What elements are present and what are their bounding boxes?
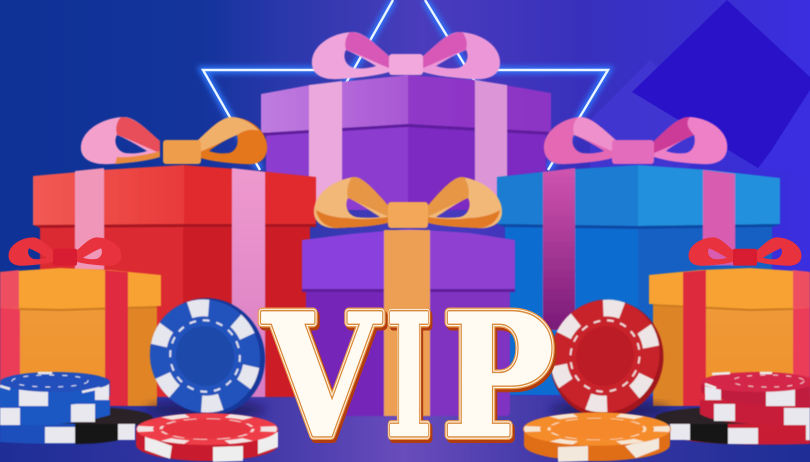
bow: orange on front box (314, 177, 502, 228)
neon star outline (203, 0, 608, 270)
bow: pink on blue box (544, 117, 727, 164)
ribbons (309, 80, 507, 210)
bow: red on left orange box (9, 237, 121, 266)
middle chip: crimson (700, 400, 810, 425)
ribbon (384, 230, 430, 416)
chip: red flat (136, 413, 278, 462)
VIP title lettering (262, 277, 556, 462)
chip stack: right (655, 372, 810, 445)
gift box: large purple back (261, 75, 551, 210)
chip: red leaning (530, 281, 683, 436)
top chip: crimson (701, 372, 810, 406)
top chip: blue (0, 372, 110, 406)
chip stack: left (0, 372, 153, 444)
gift box: blue right (497, 165, 780, 395)
bottom chip: black and crimson (655, 407, 810, 445)
gift box: orange left (0, 268, 161, 406)
I letter (386, 277, 434, 462)
ribbons (543, 168, 735, 330)
bow: red on right orange box (689, 237, 801, 266)
shadows beneath chips (145, 402, 670, 418)
gift box: purple front center (302, 229, 515, 416)
middle chip: blue (0, 400, 110, 425)
gift box: red left (33, 165, 316, 397)
bow: pink on large box (312, 32, 500, 79)
bow: pink and orange on red box (81, 117, 267, 164)
gift box: orange right (649, 268, 810, 406)
chip: blue leaning (131, 279, 284, 434)
chip: orange flat (523, 412, 671, 462)
bottom chip: black and blue (0, 407, 153, 444)
ribbons (75, 168, 265, 397)
